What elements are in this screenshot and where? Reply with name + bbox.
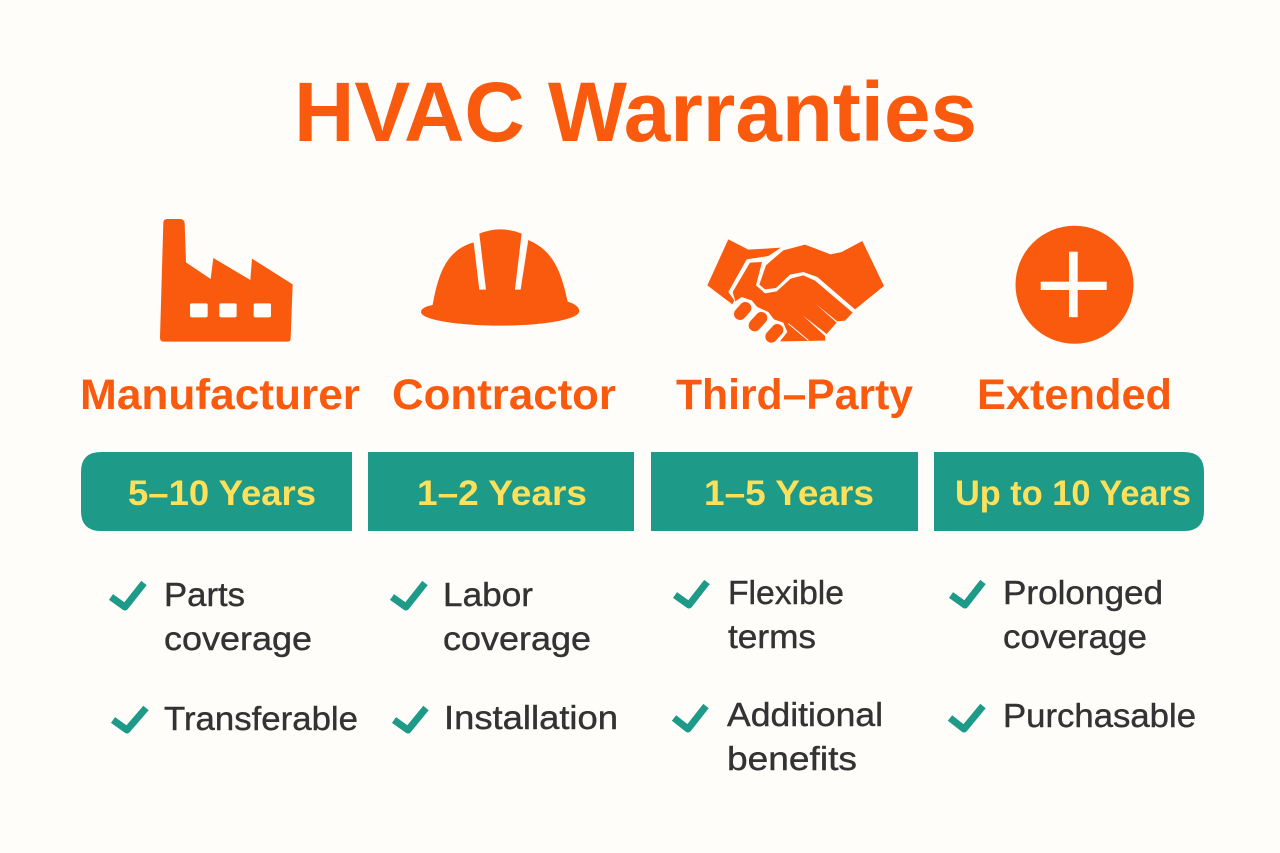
icon: plus circle (1016, 226, 1134, 344)
duration band: 1-5 Years (651, 452, 918, 531)
check: Parts coverage: coverage (164, 620, 312, 657)
duration band: 1-5 Years: 1–5 Years (704, 474, 874, 513)
fingers (740, 308, 777, 337)
check: Parts coverage (111, 576, 312, 657)
duration band: 5-10 Years (81, 452, 352, 531)
icon: hard hat (421, 229, 579, 326)
duration band: 1-2 Years: 1–2 Years (417, 474, 587, 513)
check: Installation: Installation (444, 699, 618, 736)
label: Manufacturer: Manufacturer (80, 371, 360, 419)
duration band: 5-10 Years: 5–10 Years (128, 474, 316, 513)
label: Extended: Extended (977, 371, 1172, 419)
duration band: Up to 10 Years: Up to 10 Years (955, 474, 1191, 513)
check: Prolonged coverage: coverage (1003, 618, 1147, 655)
check: Labor coverage: Labor (443, 576, 533, 613)
check: Additional benefits: Additional (727, 696, 883, 733)
check: Transferable: Transferable (164, 700, 358, 737)
check: Labor coverage: coverage (443, 620, 591, 657)
column: Manufacturer (80, 219, 360, 737)
check: Purchasable: Purchasable (1003, 697, 1196, 734)
icon: factory (160, 219, 293, 342)
label: Third-Party: Third–Party (676, 371, 913, 419)
column: Third-Party (651, 239, 918, 777)
check: Parts coverage: Parts (164, 576, 245, 613)
column: Contractor (368, 229, 634, 736)
check: Flexible terms: terms (728, 618, 816, 655)
check: Additional benefits (674, 696, 883, 777)
check: Labor coverage (392, 576, 591, 657)
duration band: 1-2 Years (368, 452, 634, 531)
icon: handshake (707, 239, 884, 341)
duration band: Up to 10 Years (934, 452, 1204, 531)
title: HVAC Warranties (294, 65, 977, 159)
check: Additional benefits: benefits (727, 740, 857, 777)
column: Extended (934, 226, 1204, 734)
label: Contractor: Contractor (392, 371, 616, 419)
check: Prolonged coverage (951, 574, 1163, 655)
check: Prolonged coverage: Prolonged (1003, 574, 1163, 611)
check: Flexible terms (675, 574, 844, 655)
check: Flexible terms: Flexible (728, 574, 844, 611)
